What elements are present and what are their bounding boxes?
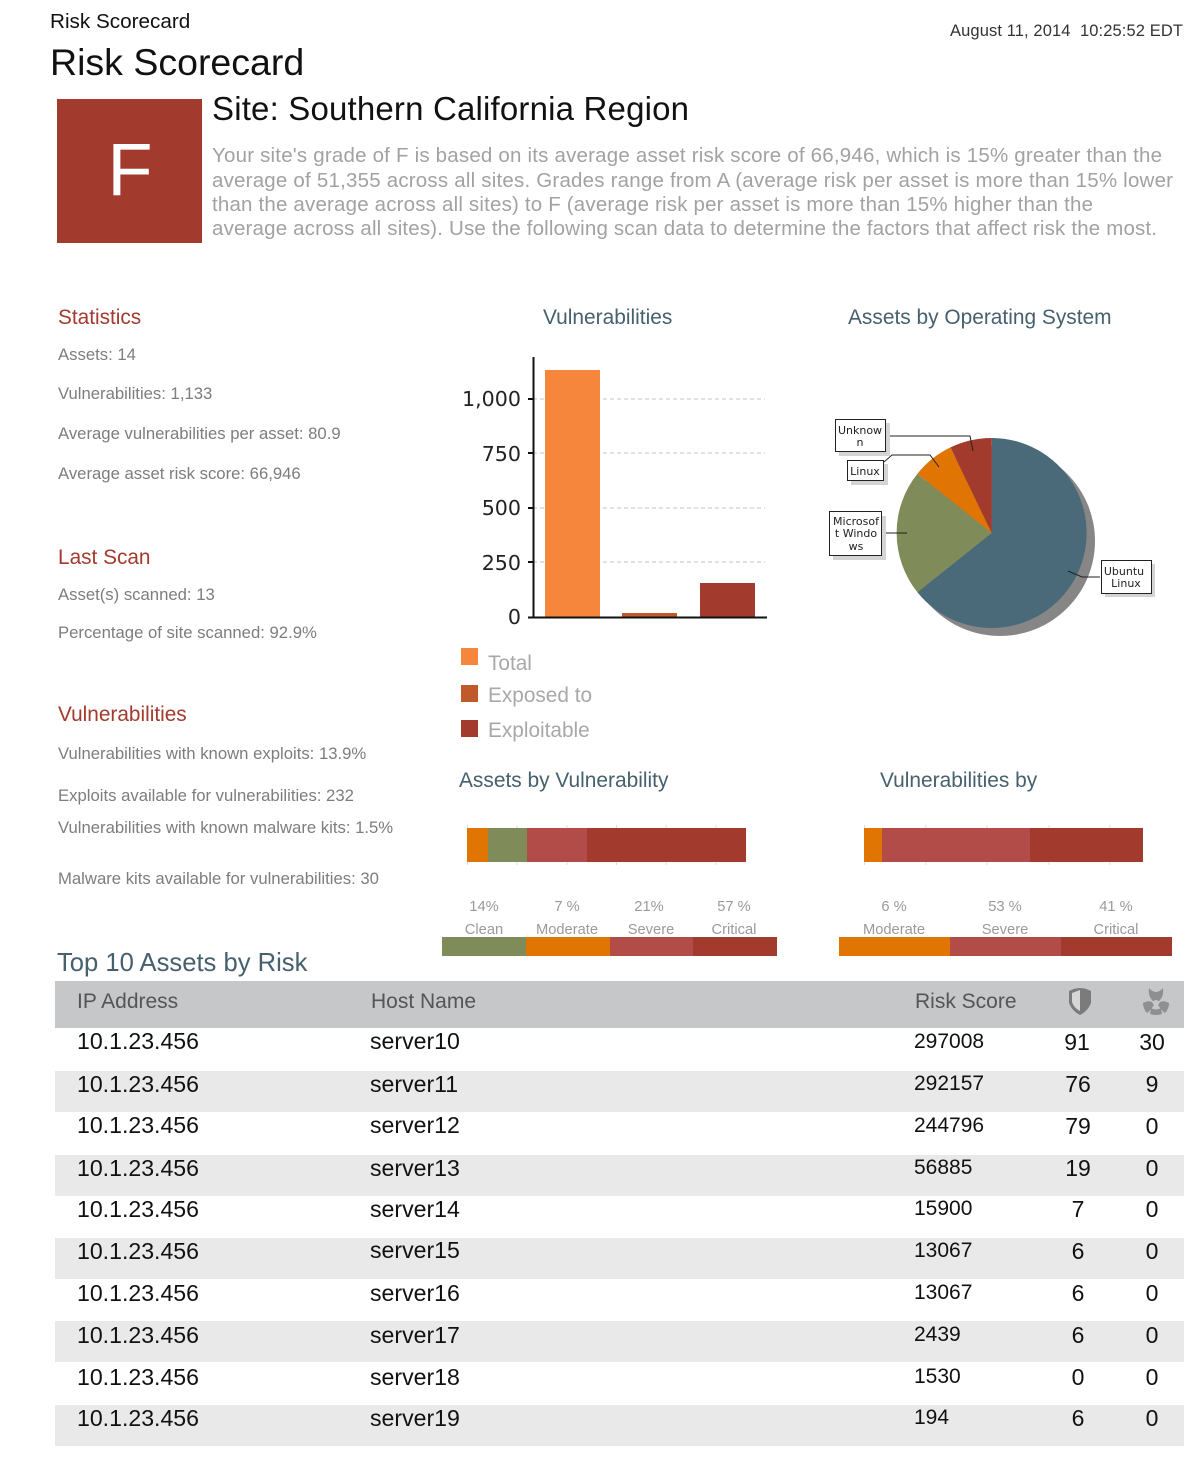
row: server14: 10.1.23.456 (77, 1196, 199, 1222)
grade description: average across all sites). Use the following scan data to determine the factors that affect risk the most. (212, 217, 1157, 240)
site heading: Site: Southern California Region (212, 90, 689, 127)
row: server14: 7 (1072, 1196, 1084, 1222)
stacked bar legend: assets by vulnerability: 14% (469, 899, 499, 915)
stacked bar legend: assets by vulnerability (442, 899, 777, 956)
bar chart legend: Exploitable (488, 719, 590, 742)
heading: assets by operating system: Assets by Operating System (848, 306, 1112, 329)
pie chart: assets by operating system: Microsof (833, 515, 880, 528)
panel: vulnerabilities summary: Exploits available for vulnerabilities: 232 (58, 786, 354, 805)
panel: last scan (58, 546, 317, 642)
row: server18 (77, 1364, 1158, 1390)
row: server15 (77, 1237, 1158, 1264)
title: Risk Scorecard (50, 41, 304, 83)
row: server15: server15 (370, 1237, 460, 1263)
heading: vulnerabilities by: Vulnerabilities by (880, 769, 1038, 792)
row: server13: 10.1.23.456 (77, 1155, 199, 1181)
row: server18: server18 (370, 1364, 460, 1390)
pie chart: assets by operating system: t Windo (835, 527, 877, 540)
row: server14: 15900 (914, 1197, 972, 1220)
row: server18: 0 (1146, 1364, 1158, 1390)
row: server18: 10.1.23.456 (77, 1364, 199, 1390)
table: top 10 assets (55, 981, 1184, 1446)
row: server18: 0 (1072, 1364, 1084, 1390)
pie chart: assets by operating system: ws (849, 540, 864, 553)
page header label: Risk Scorecard (50, 10, 190, 33)
stacked bar legend: vulnerabilities by severity: Severe (982, 922, 1028, 938)
pie chart: assets by operating system: Unknow (838, 424, 882, 437)
panel: statistics (58, 306, 341, 483)
panel: last scan: Last Scan (58, 546, 150, 569)
pie chart: assets by operating system: Linux (1111, 577, 1141, 590)
stacked bar legend: assets by vulnerability: 57 % (717, 899, 751, 915)
panel: last scan: Asset(s) scanned: 13 (58, 585, 215, 604)
stacked bar legend: assets by vulnerability: Severe (628, 922, 674, 938)
panel: statistics: Average asset risk score: 66,946 (58, 464, 301, 483)
bar chart: vulnerabilities: 1,000 (462, 387, 521, 411)
row: server17: 2439 (914, 1323, 961, 1346)
row: server12: server12 (370, 1112, 460, 1138)
panel: statistics: Average vulnerabilities per asset: 80.9 (58, 424, 341, 443)
bar chart legend: Total (488, 652, 532, 675)
pie chart: assets by operating system: Linux (850, 465, 880, 478)
row: server16: 13067 (914, 1281, 972, 1304)
table header: IP Address (77, 990, 178, 1013)
row: server17: 10.1.23.456 (77, 1322, 199, 1348)
bar chart legend: Exposed to (488, 684, 592, 707)
panel: statistics: Assets: 14 (58, 345, 136, 364)
grade description: than the average across all sites) to F (average risk per asset is more than 15% higher than the (212, 193, 1093, 216)
heading: top 10 assets by risk: Top 10 Assets by Risk (57, 949, 308, 977)
stacked bar legend: vulnerabilities by severity: 53 % (988, 899, 1022, 915)
row: server17: server17 (370, 1322, 460, 1348)
row: server19: 6 (1072, 1405, 1084, 1431)
stacked bar legend: vulnerabilities by severity (839, 899, 1172, 956)
row: server10: 91 (1064, 1029, 1090, 1055)
table row stripes (55, 1071, 1184, 1446)
row: server19: 194 (914, 1406, 949, 1429)
row: server13: 19 (1065, 1155, 1091, 1181)
row: server10: 297008 (914, 1030, 984, 1053)
panel: vulnerabilities summary: Vulnerabilities (58, 703, 187, 726)
row: server13 (77, 1155, 1158, 1181)
row: server16: 6 (1072, 1280, 1084, 1306)
pie chart: assets by operating system: Ubuntu (1104, 565, 1144, 578)
row: server19: 10.1.23.456 (77, 1405, 199, 1431)
row: server15: 6 (1072, 1238, 1084, 1264)
heading: assets by vulnerability: Assets by Vulnerability (459, 769, 669, 792)
stacked bar legend: assets by vulnerability: Critical (712, 922, 756, 938)
heading: vulnerabilities chart: Vulnerabilities (543, 306, 672, 329)
row: server12: 10.1.23.456 (77, 1112, 199, 1138)
bar chart: vulnerabilities: 750 (482, 442, 521, 466)
stacked bar: vulnerabilities by severity (864, 825, 1143, 865)
panel: vulnerabilities summary: Malware kits available for vulnerabilities: 30 (58, 869, 379, 888)
report date: August 11, 2014 10:25:52 EDT (950, 22, 1183, 40)
row: server11: 76 (1065, 1071, 1091, 1097)
grade description: average of 51,355 across all sites. Grades range from A (average risk per asset is more than 15% lower (212, 169, 1173, 192)
panel: vulnerabilities summary (58, 703, 393, 888)
row: server15: 0 (1146, 1238, 1158, 1264)
pie chart: assets by operating system: n (857, 436, 864, 449)
row: server11: 9 (1146, 1071, 1158, 1097)
row: server10 (77, 1028, 1165, 1055)
row: server12: 244796 (914, 1114, 984, 1137)
row: server12 (77, 1112, 1158, 1139)
row: server10: 10.1.23.456 (77, 1028, 199, 1054)
row: server10: 30 (1139, 1029, 1165, 1055)
row: server10: server10 (370, 1028, 460, 1054)
stacked bar legend: vulnerabilities by severity: 41 % (1099, 899, 1133, 915)
row: server16: 10.1.23.456 (77, 1280, 199, 1306)
bar chart: vulnerabilities: 500 (482, 496, 521, 520)
row: server19 (77, 1405, 1158, 1431)
stacked bar legend: vulnerabilities by severity: Critical (1094, 922, 1138, 938)
table header: Risk Score (915, 990, 1017, 1013)
row: server13: 56885 (914, 1156, 972, 1179)
grade description (212, 144, 1173, 240)
grade description: Your site's grade of F is based on its average asset risk score of 66,946, which is 15% greater than the (212, 144, 1162, 167)
grade badge: F (107, 128, 153, 211)
row: server17: 0 (1146, 1322, 1158, 1348)
panel: vulnerabilities summary: Vulnerabilities with known exploits: 13.9% (58, 744, 366, 763)
row: server16 (77, 1280, 1158, 1306)
table header: Host Name (371, 990, 476, 1013)
stacked bar: assets by vulnerability (467, 825, 746, 865)
row: server17: 6 (1072, 1322, 1084, 1348)
bar chart: vulnerabilities: 250 (482, 551, 521, 575)
stacked bar legend: assets by vulnerability: Moderate (536, 922, 598, 938)
row: server11: server11 (370, 1071, 458, 1097)
row: server19: 0 (1146, 1405, 1158, 1431)
table header (55, 981, 1184, 1028)
row: server11: 10.1.23.456 (77, 1071, 199, 1097)
row: server16: server16 (370, 1280, 460, 1306)
row: server11: 292157 (914, 1072, 984, 1095)
stacked bar legend: assets by vulnerability: 7 % (554, 899, 580, 915)
row: server17 (77, 1322, 1158, 1348)
row: server14: 0 (1146, 1196, 1158, 1222)
row: server14: server14 (370, 1196, 460, 1222)
stacked bar legend: assets by vulnerability: Clean (465, 922, 503, 938)
row: server15: 13067 (914, 1239, 972, 1262)
panel: statistics: Vulnerabilities: 1,133 (58, 384, 212, 403)
bar chart legend (461, 648, 592, 742)
row: server14 (77, 1196, 1158, 1222)
row: server15: 10.1.23.456 (77, 1238, 199, 1264)
row: server12: 0 (1146, 1113, 1158, 1139)
row: server13: server13 (370, 1155, 460, 1181)
bar chart: vulnerabilities (462, 357, 767, 629)
row: server16: 0 (1146, 1280, 1158, 1306)
row: server18: 1530 (914, 1365, 961, 1388)
stacked bar legend: vulnerabilities by severity: 6 % (881, 899, 907, 915)
stacked bar legend: vulnerabilities by severity: Moderate (863, 922, 925, 938)
panel: statistics: Statistics (58, 306, 141, 329)
bar chart: vulnerabilities: 0 (508, 605, 521, 629)
row: server11 (77, 1071, 1158, 1097)
panel: last scan: Percentage of site scanned: 92.9% (58, 623, 317, 642)
stacked bar legend: assets by vulnerability: 21% (634, 899, 664, 915)
row: server19: server19 (370, 1405, 460, 1431)
pie chart: assets by operating system (830, 420, 1155, 636)
panel: vulnerabilities summary: Vulnerabilities with known malware kits: 1.5% (58, 818, 393, 837)
grade badge (57, 99, 202, 243)
row: server13: 0 (1146, 1155, 1158, 1181)
row: server12: 79 (1065, 1113, 1091, 1139)
